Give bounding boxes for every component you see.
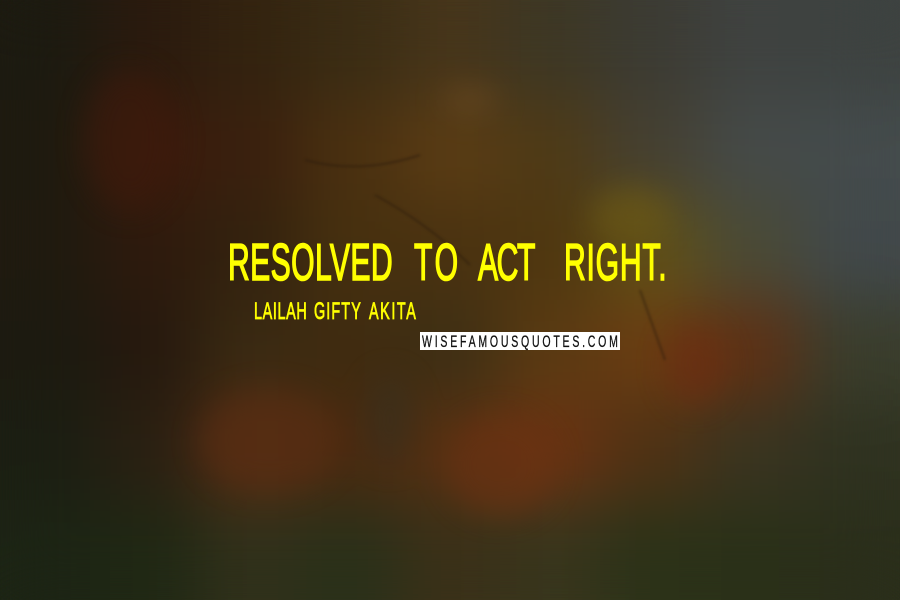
author name: AKITA (369, 298, 416, 325)
author name (254, 298, 416, 325)
watermark badge: WISEFAMOUSQUOTES.COM (422, 331, 618, 351)
author name: GIFTY (314, 298, 361, 325)
quote headline: TO (414, 235, 458, 292)
quote headline: ACT (478, 235, 535, 292)
quote headline: RIGHT. (564, 235, 667, 292)
author name: LAILAH (254, 298, 307, 325)
quote headline (228, 235, 667, 292)
quote headline: RESOLVED (228, 235, 393, 292)
